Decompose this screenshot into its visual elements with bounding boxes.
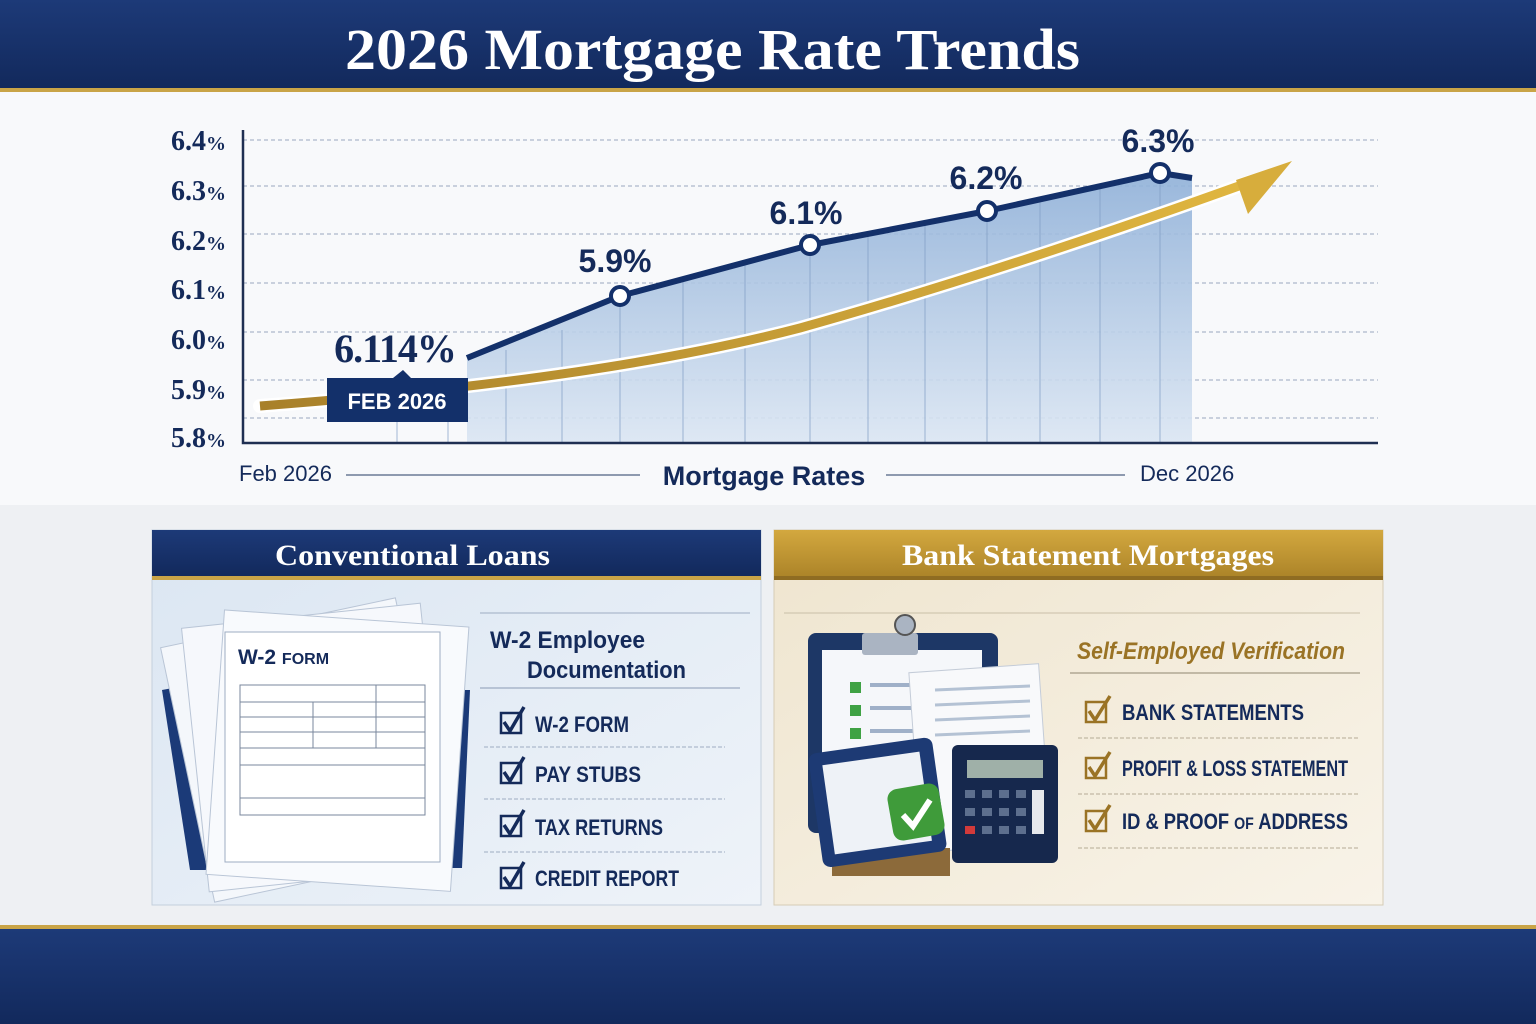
y labels: 6.1% [171,275,226,306]
text: W-2 Employee Documentation [480,613,750,688]
checklist: conventional: W-2 FORM [535,712,629,737]
checklist: bank statement [1078,696,1358,848]
axes [243,130,1378,443]
heading: conventional loans [152,530,761,580]
line chart [171,123,1378,454]
y labels: 5.8% [171,423,226,454]
checklist: conventional: CREDIT REPORT [535,866,679,891]
point labels: 6.1% [770,195,842,231]
checklist: conventional [484,707,725,891]
point labels: 5.9% [579,243,651,279]
footer bar [0,925,1536,1024]
checklist: bank statement: BANK STATEMENTS [1122,700,1304,725]
text: W-2 Employee Documentation: Documentation [527,657,686,684]
y labels [171,126,226,454]
y labels: 5.9% [171,375,226,406]
y labels: 6.2% [171,226,226,257]
checklist: bank statement: ID & PROOF OF ADDRESS [1122,809,1348,834]
FEB 2026 tag [327,370,468,422]
panel: bank statement mortgages [774,530,1383,905]
x axis caption [239,461,1234,491]
heading: conventional loans: Conventional Loans [275,539,550,572]
icon: W-2 document stack: W-2 FORM [238,646,329,669]
FEB 2026 tag: FEB 2026 [347,389,447,414]
start value label: 6.114% [334,326,456,371]
panel: conventional loans [152,530,761,905]
checklist: bank statement: PROFIT & LOSS STATEMENT [1122,756,1348,781]
chart panel background [0,92,1536,505]
rate line [467,173,1192,358]
icon: W-2 document stack [161,598,470,902]
point labels: 6.2% [950,160,1022,196]
point labels [579,123,1194,279]
text: W-2 Employee Documentation: W-2 Employee [490,627,645,654]
gold trend arrow [260,161,1292,406]
x axis caption: Feb 2026 [239,461,332,486]
x axis caption: Dec 2026 [1140,461,1234,486]
point labels: 6.3% [1122,123,1194,159]
heading: bank statement mortgages [774,530,1383,580]
y labels: 6.0% [171,325,226,356]
y labels: 6.3% [171,176,226,207]
heading: bank statement mortgages: Bank Statement Mortgages [902,539,1274,572]
y labels: 6.4% [171,126,226,157]
text: self-employed verification: Self-Employed Verification [1077,638,1345,665]
icon: clipboard, tablet and calculator [808,615,1058,876]
x axis caption: Mortgage Rates [663,461,865,491]
area fill [467,173,1192,443]
checklist: conventional: PAY STUBS [535,762,641,787]
header bar [0,0,1536,92]
checklist: conventional: TAX RETURNS [535,815,663,840]
title: 2026 Mortgage Rate Trends [345,17,1080,82]
